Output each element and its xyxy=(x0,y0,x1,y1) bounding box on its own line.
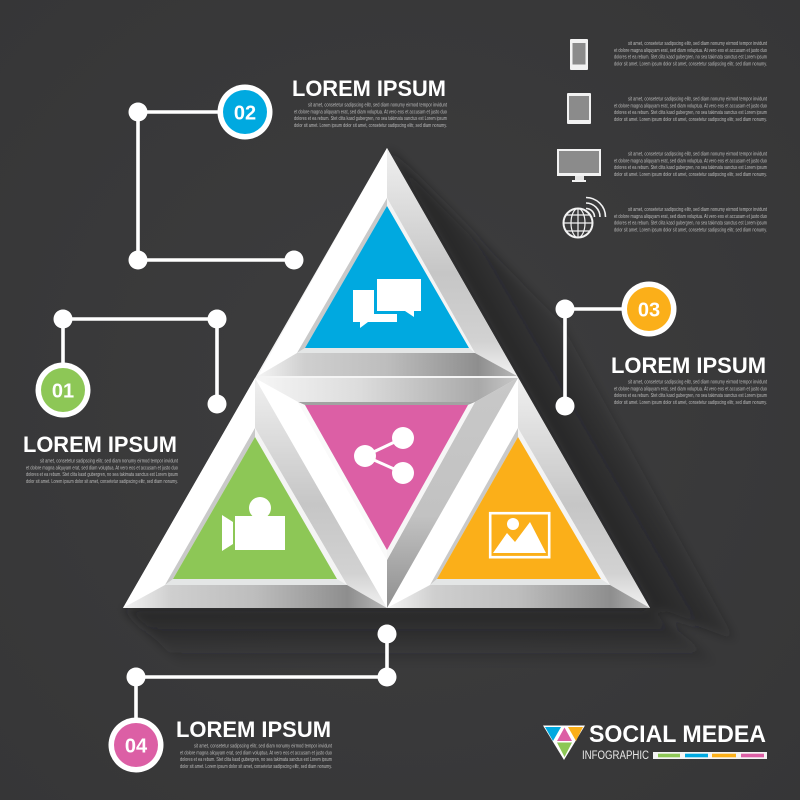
center triangle: pink share xyxy=(255,378,518,608)
left triangle: green video camera xyxy=(123,378,387,608)
heading 04: LOREM IPSUM xyxy=(176,717,331,742)
icon: video camera xyxy=(222,497,285,551)
body 02: et dolore magna aliquyam erat, sed diam voluptua. At vero eos et accusam et justo duo xyxy=(294,109,447,115)
panel: devices list xyxy=(557,39,767,238)
right triangle: orange picture xyxy=(387,378,650,608)
icon: monitor xyxy=(557,149,601,182)
heading 01: LOREM IPSUM xyxy=(23,432,177,457)
icon: logo triangle xyxy=(543,726,585,760)
connector 01 xyxy=(54,310,226,414)
panel: pyramid diagram xyxy=(123,148,650,608)
body 04: dolores et ea rebum. Stet clita kasd gubergren, no sea takimata sanctus est Lorem ipsum xyxy=(180,757,332,763)
icon: globe with signal xyxy=(564,198,606,238)
device text 3 xyxy=(614,152,767,178)
badge 03: 03 xyxy=(638,300,660,322)
body 04: sit amet, consetetur sadipscing elitr, sed diam nonumy eirmod tempor invidunt xyxy=(194,744,332,750)
icon: tablet xyxy=(567,93,591,124)
text block 04 xyxy=(176,717,332,770)
long shadow of pyramid xyxy=(124,148,735,665)
top triangle: blue speech bubbles xyxy=(258,148,517,376)
badge 03 xyxy=(622,282,676,336)
text block 03 xyxy=(611,353,767,406)
badge 04: 04 xyxy=(125,736,148,758)
body 01: dolor sit amet. Lorem ipsum dolor sit amet, consetetur sadipscing elitr, sed diam nonumy. xyxy=(26,479,178,485)
icon: speech bubbles xyxy=(353,276,424,328)
badge 01: 01 xyxy=(52,380,74,402)
colour bar xyxy=(653,752,767,759)
body 04: dolor sit amet. Lorem ipsum dolor sit amet, consetetur sadipscing elitr, sed diam nonumy. xyxy=(180,764,332,770)
body 02 xyxy=(294,102,447,129)
pyramid backing xyxy=(123,148,650,608)
body 01 xyxy=(26,458,178,485)
text block 01 xyxy=(23,432,178,485)
icon: smartphone xyxy=(570,39,588,70)
logo: social medea xyxy=(543,721,767,762)
connector 04 xyxy=(126,624,396,745)
body 04: et dolore magna aliquyam erat, sed diam voluptua. At vero eos et accusam et justo duo xyxy=(180,750,332,756)
logo title: SOCIAL MEDEA xyxy=(589,721,766,748)
body 04 xyxy=(180,744,332,770)
body 02: dolores et ea rebum. Stet clita kasd gubergren, no sea takimata sanctus est Lorem ipsum xyxy=(294,116,447,122)
device text 1: sit amet, consetetur sadipscing elitr, sed diam nonumy eirmod tempor invidunt xyxy=(628,41,767,47)
logo subtitle: INFOGRAPHIC xyxy=(582,750,649,762)
device text 4: sit amet, consetetur sadipscing elitr, sed diam nonumy eirmod tempor invidunt xyxy=(628,207,767,213)
body 02: sit amet, consetetur sadipscing elitr, sed diam nonumy eirmod tempor invidunt xyxy=(308,102,447,108)
heading 02: LOREM IPSUM xyxy=(292,76,446,101)
body 01: sit amet, consetetur sadipscing elitr, sed diam nonumy eirmod tempor invidunt xyxy=(40,458,178,464)
heading 03: LOREM IPSUM xyxy=(611,353,766,378)
icon: picture xyxy=(490,513,549,557)
connector 02 xyxy=(128,102,304,270)
device text 2: sit amet, consetetur sadipscing elitr, sed diam nonumy eirmod tempor invidunt xyxy=(628,96,767,102)
badge 02 xyxy=(218,84,272,140)
body 01: dolores et ea rebum. Stet clita kasd gubergren, no sea takimata sanctus est Lorem ipsum xyxy=(26,472,178,478)
body 03 xyxy=(614,380,767,406)
device text 4 xyxy=(614,207,767,233)
badge 02: 02 xyxy=(234,102,256,124)
body 01: et dolore magna aliquyam erat, sed diam voluptua. At vero eos et accusam et justo duo xyxy=(26,465,178,471)
body 03: sit amet, consetetur sadipscing elitr, sed diam nonumy eirmod tempor invidunt xyxy=(628,380,767,386)
badge 04 xyxy=(108,718,164,772)
body 02: dolor sit amet. Lorem ipsum dolor sit amet, consetetur sadipscing elitr, sed diam nonumy. xyxy=(294,123,447,129)
device text 1 xyxy=(614,41,767,67)
connector 03 xyxy=(556,300,649,416)
icon: share xyxy=(354,427,414,484)
text block 02 xyxy=(292,76,447,129)
badge 01 xyxy=(36,362,90,418)
device text 2 xyxy=(614,96,767,123)
device text 3: sit amet, consetetur sadipscing elitr, sed diam nonumy eirmod tempor invidunt xyxy=(628,152,767,158)
